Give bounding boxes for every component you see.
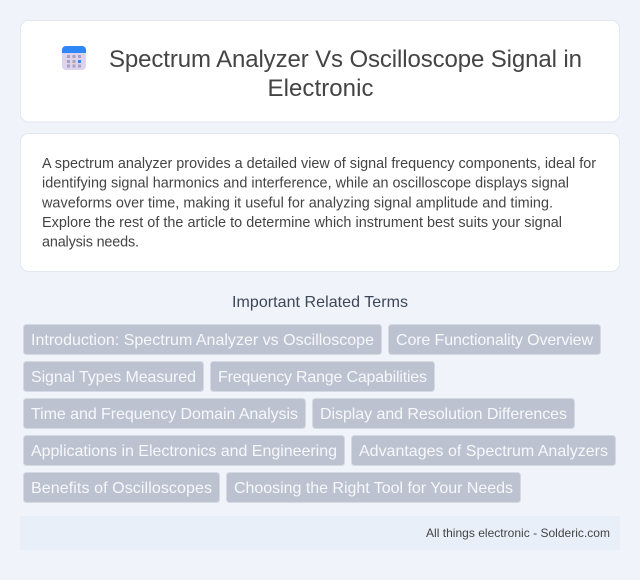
tag: Time and Frequency Domain Analysis	[31, 406, 298, 423]
tag	[388, 324, 600, 354]
tag: Benefits of Oscilloscopes	[31, 480, 212, 497]
footer: All things electronic - Solderic.com	[426, 526, 610, 540]
tag	[24, 436, 344, 466]
panel: title card	[20, 20, 620, 122]
tag: Advantages of Spectrum Analyzers	[359, 443, 608, 460]
footer	[20, 516, 620, 550]
tag	[352, 436, 616, 466]
tag: Applications in Electronics and Engineering	[31, 443, 337, 460]
title: Electronic	[268, 75, 374, 102]
summary text	[41, 156, 596, 250]
tag	[24, 362, 204, 392]
panel: summary card	[20, 134, 620, 272]
tag: Choosing the Right Tool for Your Needs	[234, 480, 513, 497]
tag: Core Functionality Overview	[396, 332, 593, 349]
summary text: analysis needs.	[42, 234, 139, 250]
tag: Signal Types Measured	[31, 369, 196, 386]
title: Spectrum Analyzer Vs Oscilloscope Signal in	[109, 46, 582, 73]
tag list	[24, 324, 616, 502]
tag	[24, 472, 220, 502]
summary text: waveforms over time, making it useful for analyzing signal amplitude and timing.	[41, 196, 553, 212]
tag	[210, 362, 434, 392]
tag	[24, 324, 382, 354]
tag	[24, 398, 306, 428]
tag	[226, 472, 520, 502]
summary text: A spectrum analyzer provides a detailed view of signal frequency components, ideal for	[42, 156, 596, 172]
icon: calendar	[62, 46, 86, 70]
summary text: identifying signal harmonics and interference, while an oscilloscope displays signal	[42, 176, 569, 192]
summary text: Explore the rest of the article to determine which instrument best suits your signal	[42, 215, 562, 231]
tag: Display and Resolution Differences	[320, 406, 567, 423]
tag	[312, 398, 574, 428]
tag: Frequency Range Capabilities	[218, 369, 427, 386]
tag: Introduction: Spectrum Analyzer vs Oscilloscope	[31, 332, 374, 349]
heading: important related terms: Important Related Terms	[232, 294, 408, 311]
title	[109, 46, 582, 102]
